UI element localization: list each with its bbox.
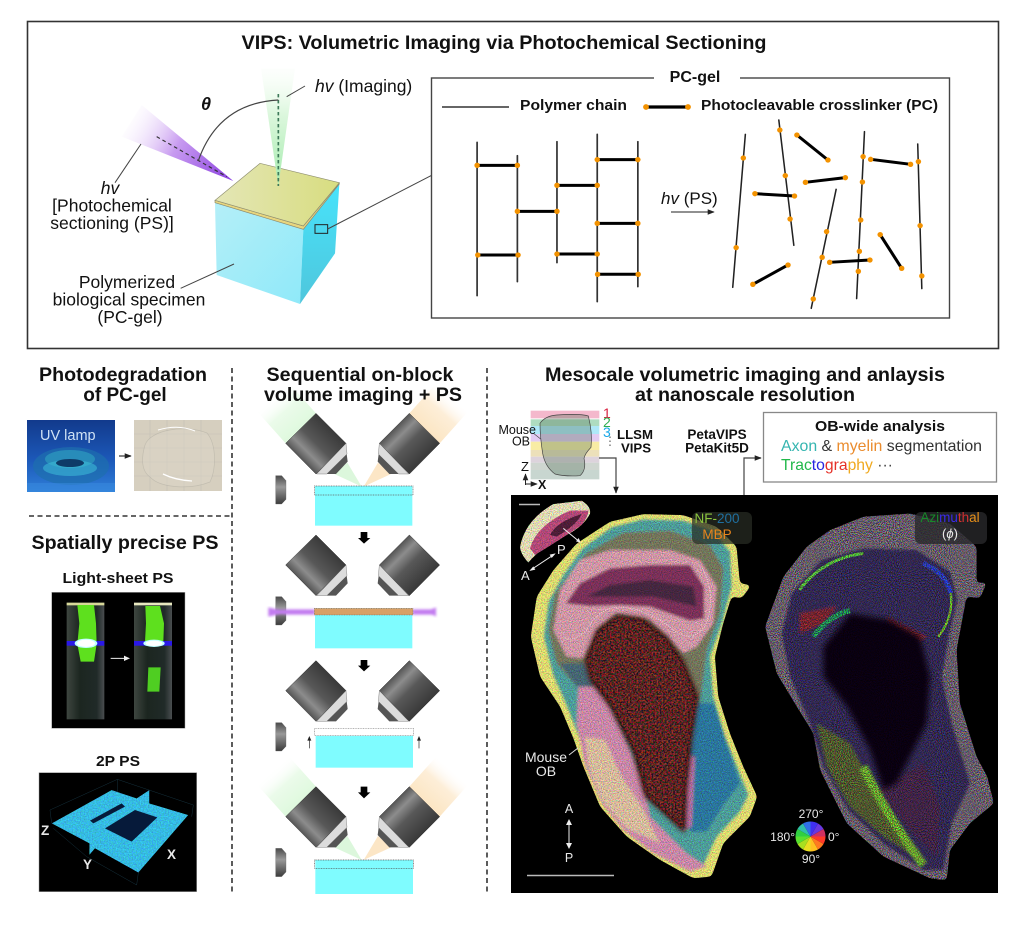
- label: section numbers: 1: [603, 405, 611, 421]
- label: mouse OB in section: [525, 748, 578, 779]
- heading: Sequential on-block: [266, 365, 454, 386]
- axis: A-P: P: [565, 851, 573, 865]
- step 2: photochemical sectioning: [268, 535, 440, 648]
- connector: to analysis: [744, 458, 761, 495]
- panel: spatially precise PS: [32, 533, 218, 892]
- label: PetaVIPS: PetaKit5D: [685, 440, 749, 456]
- image panel: olfactory bulb: [511, 495, 998, 893]
- panel: photodegradation: [27, 365, 222, 492]
- label: NF-200 and MBP: MBP: [702, 527, 732, 542]
- label: azimuthal: Azimuthal: [920, 510, 980, 525]
- label: photochemical sectioning: hv: [101, 178, 120, 198]
- angle arc: [198, 100, 278, 161]
- image: 2P PS volume: Y: [83, 857, 92, 872]
- axes: Z X: X: [538, 478, 547, 492]
- step 3: removal: [276, 661, 440, 768]
- axes: Z X: [521, 459, 547, 492]
- color wheel legend: 270°: [799, 807, 824, 821]
- label: LLSM VIPS: VIPS: [621, 440, 651, 456]
- diagram: cleaved network: [733, 120, 925, 308]
- heading: of PC-gel: [83, 385, 167, 406]
- label: polymerized specimen: Polymerized: [79, 272, 175, 292]
- image: 2P PS volume: X: [167, 847, 176, 862]
- scale bar: inset: [519, 504, 540, 506]
- step 1: imaging: [257, 382, 468, 526]
- label: LLSM VIPS: LLSM: [617, 427, 653, 442]
- label: mouse OB: OB: [512, 434, 530, 448]
- diagram: sections stack: [531, 411, 599, 479]
- photo: UV lamp: [27, 420, 115, 492]
- image: NF-200 and MBP brain section: [520, 501, 757, 878]
- heading: Mesocale volumetric imaging and anlaysis: [545, 365, 945, 386]
- label: mouse OB in section: OB: [536, 763, 556, 779]
- scale bar: main: [527, 874, 614, 876]
- heading: [264, 365, 462, 406]
- label: azimuthal: [915, 510, 987, 544]
- beam: imaging: [261, 68, 295, 186]
- image: 2P PS volume: [39, 773, 197, 892]
- text: tractography: Tractography ···: [781, 457, 893, 474]
- label: section numbers: [603, 405, 616, 448]
- arrow: [358, 532, 370, 544]
- label: theta: θ: [201, 94, 211, 114]
- legend: Polymer chain: [520, 98, 627, 114]
- heading: Spatially precise PS: [32, 533, 218, 554]
- subheading: light-sheet: Light-sheet PS: [62, 571, 174, 587]
- text: segmentation: Axon & myelin segmentation: [781, 438, 982, 455]
- label: mouse OB in section: Mouse: [525, 749, 567, 765]
- label: inset axes: A: [521, 568, 530, 583]
- label: section numbers: 3: [603, 424, 611, 440]
- label: polymerized specimen: (PC-gel): [97, 307, 163, 327]
- arrow: [358, 660, 370, 671]
- label: photochemical sectioning: [Photochemical: [52, 196, 172, 216]
- axis: A-P: A: [565, 802, 574, 816]
- heading: OB-wide analysis: [815, 418, 945, 435]
- panel: OB-wide analysis: [764, 412, 996, 482]
- heading: [545, 365, 945, 406]
- arrow: hv PS: hv (PS): [661, 189, 718, 208]
- photo: degraded gel: [134, 420, 222, 491]
- panel: VIPS overview: [28, 22, 998, 348]
- label: polymerized specimen: biological specimen: [53, 290, 205, 310]
- label: PetaVIPS: PetaVIPS: [687, 427, 747, 442]
- legend: Photocleavable crosslinker (PC): [701, 98, 938, 114]
- cube: [215, 163, 339, 304]
- axes: Z X: Z: [521, 459, 529, 474]
- label: NF-200 and MBP: [692, 511, 752, 544]
- color wheel legend: 180°: [770, 830, 795, 844]
- title: VIPS: Volumetric Imaging via Photochemical Sectioning: [242, 33, 766, 54]
- label: mouse OB: Mouse: [498, 423, 536, 437]
- label: inset axes: P: [557, 542, 566, 557]
- heading: [39, 365, 207, 406]
- heading: at nanoscale resolution: [635, 385, 855, 406]
- panel: sequential imaging: [257, 365, 468, 894]
- beam: photochemical sectioning: [122, 105, 233, 181]
- label: section numbers: 2: [603, 414, 611, 430]
- axis: A-P: [565, 802, 574, 865]
- subheading: 2P: 2P PS: [96, 754, 140, 770]
- connector: to image: [599, 458, 616, 493]
- color wheel legend: 0°: [828, 830, 840, 844]
- arrow: [119, 455, 131, 457]
- label: section numbers: ⋮: [604, 434, 616, 448]
- heading: volume imaging + PS: [264, 385, 462, 406]
- panel: PC-gel schematic: [432, 68, 950, 318]
- inset: whole bulb: [520, 501, 590, 571]
- label: NF-200 and MBP: NF-200: [694, 511, 740, 526]
- photo: light-sheet PS: [52, 592, 185, 728]
- label: inset axes: [521, 542, 566, 583]
- panel: mesoscale imaging: [498, 365, 998, 893]
- label: azimuthal: (ϕ): [942, 526, 958, 541]
- heading: Photodegradation: [39, 365, 207, 386]
- heading: PC-gel: PC-gel: [670, 69, 720, 86]
- step 4: imaging: [257, 755, 468, 894]
- arrow: [358, 787, 370, 798]
- photo: UV lamp: UV lamp: [40, 428, 96, 444]
- color wheel legend: 90°: [802, 852, 820, 866]
- color wheel legend: [770, 807, 840, 866]
- legend: [442, 98, 938, 114]
- label: photochemical sectioning: sectioning (PS)]: [50, 213, 174, 233]
- label: imaging light: hv (Imaging): [315, 76, 412, 96]
- diagram: specimen cube with light beams: [115, 68, 432, 304]
- diagram: intact network: [474, 134, 641, 302]
- image: 2P PS volume: Z: [41, 823, 49, 838]
- image: azimuthal orientation map: [765, 513, 994, 881]
